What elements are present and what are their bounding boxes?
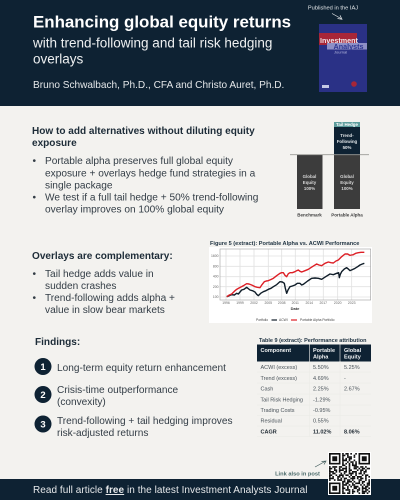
chart: portfolio structure bars: Equity (340, 180, 354, 185)
chart: portable alpha vs ACWI performance: 2023 (348, 301, 356, 305)
finding 3 (34, 416, 233, 439)
chart: portable alpha vs ACWI performance: 2005 (265, 301, 272, 305)
finding 3: 3 (40, 420, 46, 430)
arrow: to QR code (315, 461, 326, 467)
chart: portable alpha vs ACWI performance: 2011 (292, 301, 299, 305)
chart: portable alpha vs ACWI performance: 2008 (278, 301, 286, 305)
table: performance attribution: Tail Risk Hedging (260, 398, 303, 404)
published note: Published in the IAJ (308, 6, 358, 12)
table: performance attribution: 11.02% (313, 430, 331, 436)
chart title: Figure 5 (extract): Portable Alpha vs. ACWI Performance (210, 241, 359, 247)
authors: Bruno Schwalbach, Ph.D., CFA and Christo Auret, Ph.D. (33, 80, 284, 91)
panel: how to add alternatives (32, 126, 258, 215)
chart: portfolio structure bars: 100% (341, 186, 353, 191)
finding 1: 1 (40, 362, 46, 373)
bullet list: sudden crashes (45, 281, 116, 292)
subtitle: overlays (33, 52, 84, 66)
heading: exposure (32, 138, 77, 149)
table: performance attribution: CAGR (260, 430, 277, 436)
heading: Overlays are complementary: (32, 251, 173, 262)
table: performance attribution: 5.25% (344, 365, 360, 371)
chart: portfolio structure bars: Following (337, 139, 358, 144)
bullet list: • (32, 192, 36, 203)
panel: overlays are complementary (32, 251, 175, 316)
panel: footer: Read full article free in the latest Investment Analysts Journal (33, 485, 307, 496)
finding 1: Long-term equity return enhancement (57, 363, 226, 374)
table: performance attribution: Component (260, 348, 291, 354)
chart: portable alpha vs ACWI performance: 1600 (211, 254, 219, 258)
chart: portfolio structure bars: 50% (343, 145, 351, 150)
chart: portable alpha vs ACWI performance: Date (291, 306, 300, 311)
finding 3: risk-adjusted returns (57, 428, 148, 439)
finding 1 (34, 358, 226, 375)
finding 3: Trend-following + tail hedging improves (57, 416, 233, 427)
bullet list: Portable alpha preserves full global equity (45, 156, 234, 167)
table: performance attribution (257, 338, 371, 436)
table: performance attribution: Alpha (313, 354, 329, 360)
table: performance attribution: - (344, 376, 346, 382)
arrow: to journal cover (332, 14, 342, 19)
finding 2: (convexity) (57, 397, 106, 408)
table: performance attribution: Portable (313, 348, 335, 354)
table: performance attribution: 2.67% (344, 386, 360, 392)
chart: portfolio structure bars: Global (340, 174, 354, 179)
chart: portable alpha vs ACWI performance: 100 (213, 295, 219, 299)
panel: findings (34, 337, 233, 439)
title: Enhancing global equity returns (33, 12, 291, 32)
chart: portable alpha vs ACWI performance: 800 (213, 264, 219, 268)
chart: portable alpha vs ACWI performance: 2020 (334, 301, 342, 305)
table: performance attribution: -0.95% (313, 408, 331, 414)
table: performance attribution: Trend (excess) (260, 376, 297, 382)
chart: portable alpha vs ACWI performance: 400 (213, 275, 219, 279)
table: performance attribution: ACWI (excess) (260, 365, 297, 371)
chart: portfolio structure bars: Trend- (340, 133, 354, 138)
bullet list: • (32, 293, 36, 304)
table caption: Table 9 (extract): Performance attribution (259, 338, 367, 344)
bullet list: exposure + overlays hedge fund strategies in a (45, 168, 256, 179)
heading: Findings: (35, 337, 80, 348)
table: performance attribution: Residual (260, 418, 282, 424)
table: performance attribution: 4.69% (313, 376, 329, 382)
table: performance attribution: Equity (344, 354, 362, 360)
subtitle: with trend-following and tail risk hedging (32, 36, 272, 50)
chart: portable alpha vs ACWI performance: 1999 (236, 301, 244, 305)
chart: portable alpha vs ACWI performance: 1996 (222, 301, 230, 305)
table: performance attribution: 8.06% (344, 430, 360, 436)
bullet list: • (32, 156, 36, 167)
heading: How to add alternatives without diluting equity (32, 126, 255, 137)
icon: journal cover (319, 24, 367, 92)
link note: Link also in post (275, 472, 320, 478)
chart: portable alpha vs ACWI performance: 2002 (250, 301, 258, 305)
chart: portfolio structure bars: Tail Hedge (336, 122, 358, 127)
bullet list: We test if a full tail hedge + 50% trend-following (45, 192, 258, 203)
bullet list: value in slow bear markets (45, 305, 165, 316)
chart: portable alpha vs ACWI performance: 200 (213, 285, 219, 289)
bullet list: overlay improves on 100% global equity (45, 204, 225, 215)
finding 2: Crisis-time outperformance (57, 385, 179, 396)
table: performance attribution: -1.29% (313, 398, 331, 404)
chart: portfolio structure bars: Equity (303, 180, 317, 185)
icon: journal cover: Journal (334, 50, 347, 54)
chart: portable alpha vs ACWI performance (209, 241, 372, 323)
table: performance attribution: 2.25% (313, 386, 329, 392)
icon: journal cover: Investment (320, 36, 359, 45)
panel: header (0, 0, 400, 106)
chart legend: ACWI (279, 318, 288, 322)
chart: portable alpha vs ACWI performance: 2014 (306, 301, 313, 305)
bullet list: Tail hedge adds value in (45, 269, 154, 280)
icon: journal cover: Analysts (334, 42, 363, 51)
chart legend: Portfolio (256, 318, 268, 322)
chart: portfolio structure bars: Benchmark (297, 212, 322, 218)
table: performance attribution: 0.55% (313, 418, 329, 424)
chart legend: Portable Alpha Portfolio (300, 318, 335, 322)
icon: QR code (328, 452, 371, 495)
bullet list: single package (45, 180, 113, 192)
bullet list: Trend-following adds alpha + (45, 293, 175, 304)
finding 2: 2 (40, 390, 46, 401)
finding 2 (34, 385, 179, 408)
chart: portfolio structure bars: Portable Alpha (331, 212, 363, 218)
chart: portfolio structure bars: 100% (304, 186, 315, 191)
panel: footer (0, 479, 400, 500)
table: performance attribution: Global (344, 348, 362, 354)
chart: portfolio structure bars: Global (303, 174, 316, 179)
table: performance attribution: Cash (260, 386, 273, 392)
chart: portable alpha vs ACWI performance: 2017 (320, 301, 327, 305)
table: performance attribution: 5.50% (313, 365, 329, 371)
chart: portfolio structure bars (290, 122, 369, 218)
chart legend (256, 318, 335, 322)
bullet list: • (32, 269, 36, 280)
table: performance attribution: Trading Costs (260, 408, 295, 414)
